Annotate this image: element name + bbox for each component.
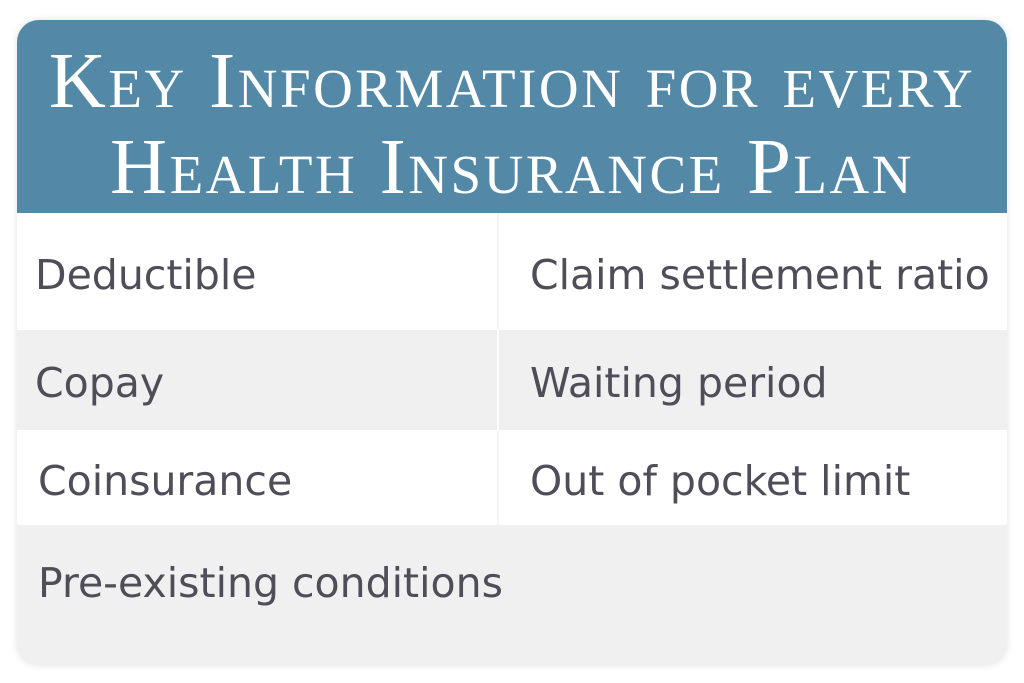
item: claim settlement ratio: Claim settlement ratio [530, 250, 990, 298]
item: waiting period: Waiting period [530, 359, 828, 407]
item: claim settlement ratio [497, 213, 1007, 330]
item: waiting period [497, 330, 1007, 430]
item: out of pocket limit: Out of pocket limit [530, 456, 910, 504]
item: coinsurance: Coinsurance [38, 456, 292, 504]
title line 1: Key Information for every [49, 38, 975, 125]
title line 2: Health Insurance Plan [110, 124, 914, 211]
header [17, 20, 1007, 213]
item: copay: Copay [35, 359, 164, 407]
row 3 [17, 430, 1007, 525]
item: pre-existing conditions: Pre-existing conditions [38, 559, 503, 607]
item: out of pocket limit [497, 430, 1007, 525]
item: deductible: Deductible [35, 250, 256, 298]
row 4 [17, 525, 1007, 665]
row 2 [17, 330, 1007, 430]
row 1 [17, 213, 1007, 330]
